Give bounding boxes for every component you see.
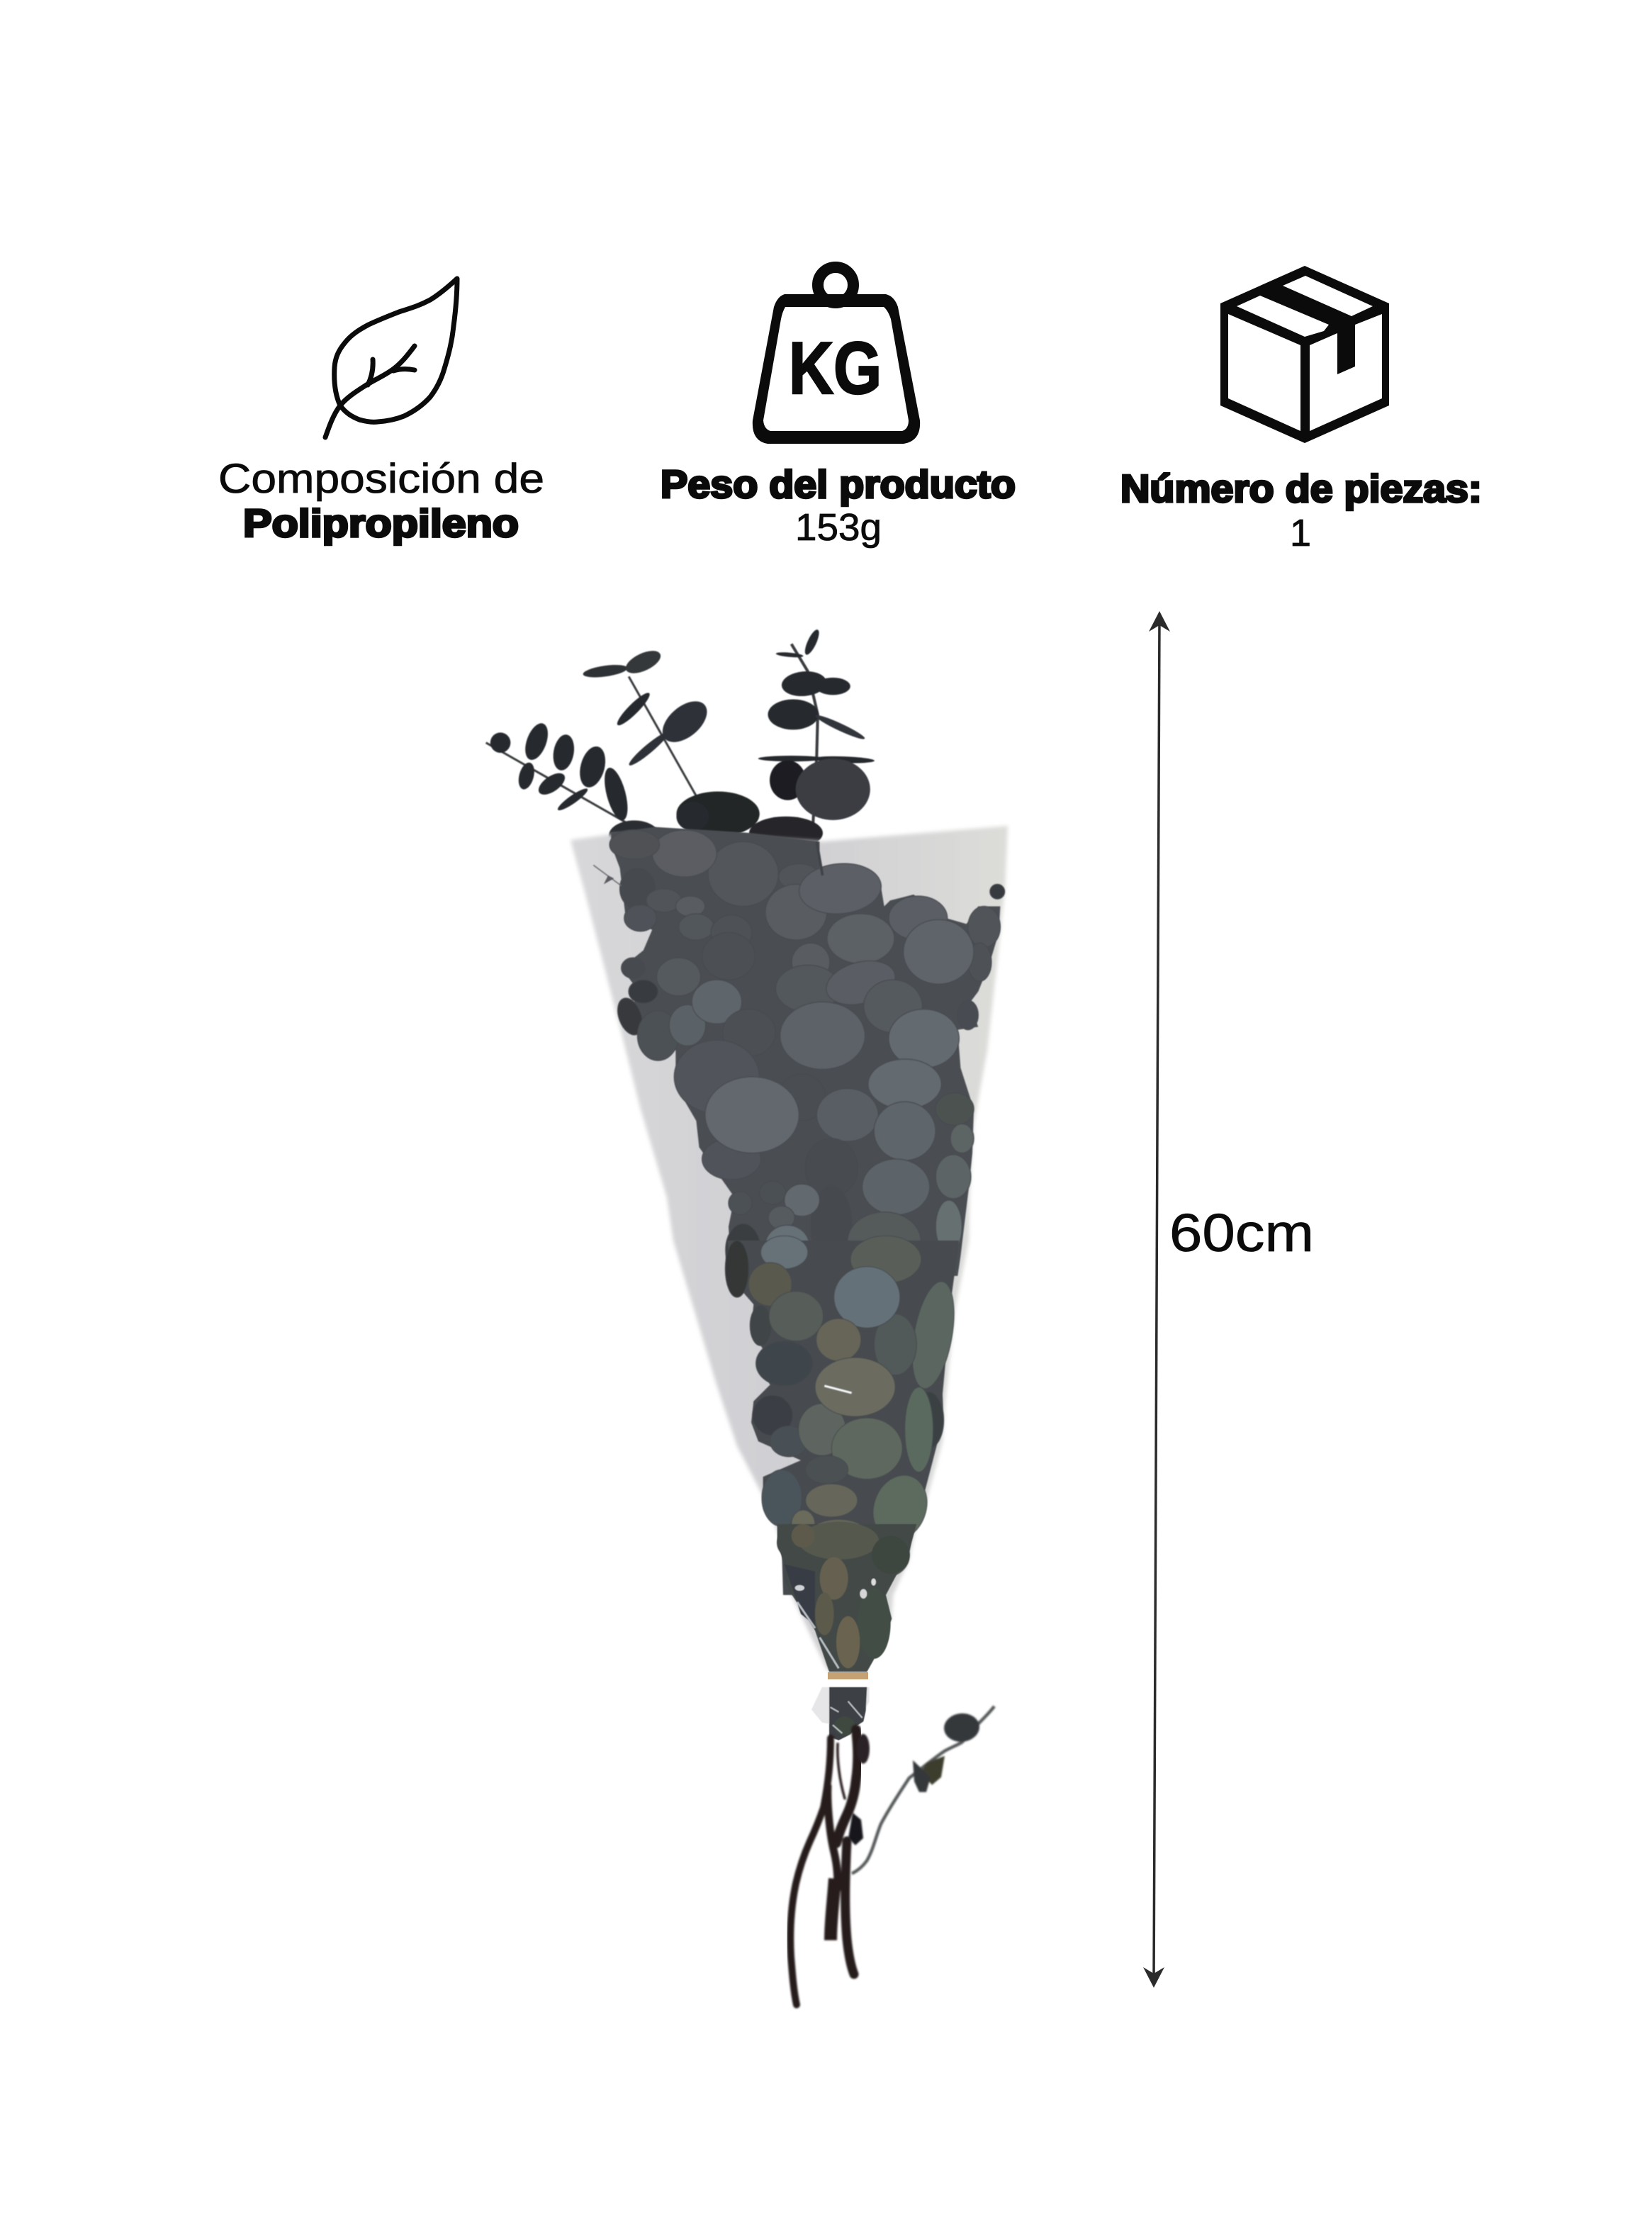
plastic wrap (571, 826, 1008, 1670)
small sprig with leaves (852, 1706, 994, 1874)
text: 153g: 153g (795, 506, 882, 549)
text: Número de piezas: Número de piezas: (1120, 466, 1482, 510)
foliage mass upper (593, 827, 1005, 1277)
top sprigs (486, 628, 875, 877)
icon: leaf (325, 279, 457, 437)
text: Composición de: Composición de (218, 456, 544, 502)
panel: composition (218, 279, 544, 545)
text: Polipropileno: Polipropileno (243, 501, 519, 545)
text: Peso del producto: Peso del producto (661, 462, 1016, 506)
stems (790, 1730, 858, 2005)
text: 1: 1 (1290, 512, 1311, 554)
height arrow (1143, 611, 1170, 1988)
icon: kilogram weight (753, 267, 920, 444)
photo: eucalyptus bouquet in wrap (486, 628, 1008, 2005)
plastic flap and stem bundle (811, 1687, 870, 1740)
icon: kilogram weight: KG (789, 328, 882, 410)
stem leaves (848, 1734, 870, 1845)
icon: cardboard box (1220, 266, 1389, 443)
text: 60cm: 60cm (1169, 1203, 1314, 1263)
foliage mass lower (725, 1236, 961, 1597)
panel: pieces (1120, 266, 1482, 554)
panel: weight (661, 267, 1016, 549)
neck of bouquet and rubber band (777, 1522, 916, 1740)
